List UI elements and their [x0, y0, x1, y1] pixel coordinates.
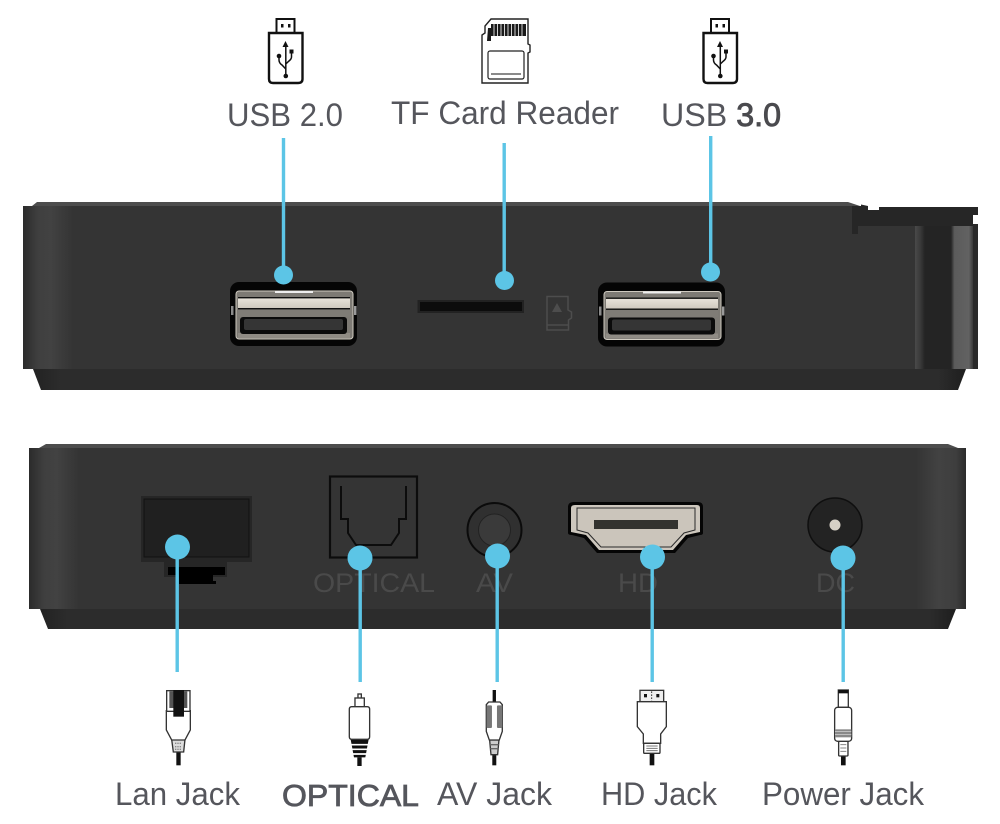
- rear silkscreen labels: OPTICAL: [313, 568, 435, 598]
- foot: [33, 369, 966, 390]
- side face filler: [858, 226, 916, 369]
- label: USB 2.0: USB 2.0: [227, 97, 343, 133]
- foot: [40, 609, 956, 629]
- top edge highlight: [32, 202, 860, 222]
- label: TF Card Reader: TF Card Reader: [391, 95, 619, 131]
- label: AV Jack: AV Jack: [437, 776, 553, 812]
- icon: TF card: [482, 19, 530, 83]
- optical port: [330, 476, 417, 558]
- icon: HD plug: [637, 690, 666, 765]
- front face: [23, 206, 858, 369]
- USB 3.0 port: [598, 282, 725, 346]
- label: OPTICAL: OPTICAL: [282, 778, 419, 813]
- USB 2.0 port: [230, 282, 357, 346]
- label: USB 3.0: USB 3.0: [661, 97, 781, 133]
- micro SD logo: [547, 296, 572, 330]
- label: HD Jack: HD Jack: [601, 776, 718, 812]
- icon: USB 3.0 stick: [704, 19, 737, 83]
- LAN port: [141, 496, 252, 584]
- callout: LAN: [165, 534, 190, 672]
- callout: AV: [485, 544, 510, 682]
- callout: HD: [640, 544, 665, 682]
- DC port: [808, 498, 862, 552]
- callout: USB 3.0: [701, 136, 720, 282]
- rear silkscreen labels: [313, 568, 855, 598]
- callout: optical: [348, 546, 372, 682]
- TF card slot: [418, 300, 524, 313]
- rear silkscreen labels: AV: [476, 568, 513, 598]
- icon: USB 2.0 stick: [269, 19, 302, 83]
- icon: optical plug: [349, 694, 370, 766]
- callout: DC: [830, 546, 856, 682]
- top clip section: [852, 204, 978, 234]
- icon: LAN plug: [166, 690, 190, 765]
- device: rear panel: [29, 444, 966, 629]
- side end strip: [973, 224, 978, 369]
- label: Power Jack: Power Jack: [762, 776, 925, 812]
- rear face: [29, 448, 966, 609]
- label: Lan Jack: Lan Jack: [115, 776, 241, 812]
- HDMI port: [568, 502, 703, 553]
- callout: TF card: [495, 143, 514, 290]
- AV port: [468, 503, 522, 557]
- device: front panel: [23, 202, 978, 390]
- rear silkscreen labels: HD: [618, 568, 658, 598]
- rear silkscreen labels: DC: [816, 568, 855, 598]
- callout: USB 2.0: [274, 138, 293, 284]
- icon: AV plug: [486, 690, 502, 765]
- icon: power plug: [835, 690, 852, 765]
- side gloss section: [915, 226, 973, 369]
- top edge highlight: [39, 444, 958, 460]
